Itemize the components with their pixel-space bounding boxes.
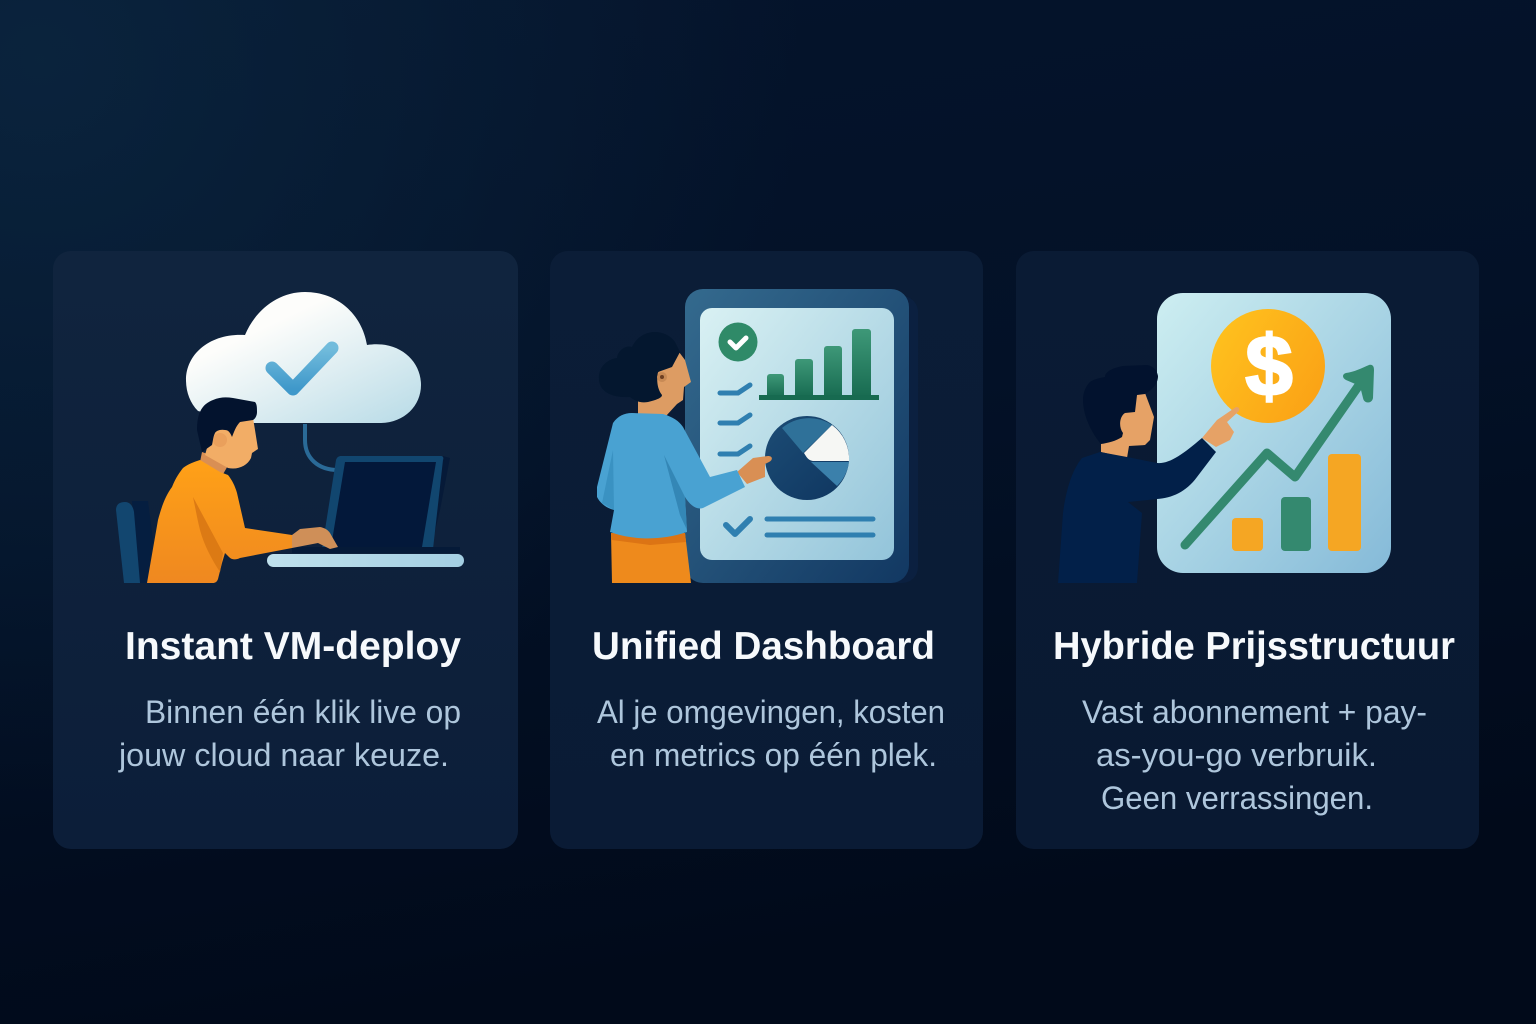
illustration: person deploying to cloud: [116, 292, 464, 583]
growth arrow: [1185, 365, 1374, 545]
body text: [1082, 694, 1427, 816]
pricing board: [1157, 293, 1391, 573]
person pointing: [1058, 365, 1239, 583]
body text: Vast abonnement + pay-: [1082, 694, 1427, 730]
body text: jouw cloud naar keuze.: [118, 737, 449, 773]
body text: [118, 694, 461, 773]
body text: [597, 694, 945, 773]
person pointing: [597, 332, 772, 583]
pie chart: [765, 416, 849, 500]
chair: [116, 501, 153, 583]
heading: Instant VM-deploy: [125, 625, 461, 668]
bar chart: [759, 329, 879, 400]
icon: dollar coin: $: [1245, 319, 1293, 414]
dashboard screen: [700, 308, 894, 560]
body text: Geen verrassingen.: [1101, 780, 1373, 816]
panel: Unified Dashboard: [550, 251, 983, 849]
tablet frame: [685, 289, 918, 583]
heading: Hybride Prijsstructuur: [1053, 625, 1455, 668]
keyboard bar: [267, 554, 464, 567]
connector cable: [305, 424, 338, 470]
summary lines with check: [726, 519, 873, 535]
icon: green check: [718, 322, 758, 362]
body text: Al je omgevingen, kosten: [597, 694, 945, 730]
body text: en metrics op één plek.: [610, 737, 937, 773]
bar chart: [1232, 454, 1361, 551]
heading: Unified Dashboard: [592, 625, 935, 668]
person typing: [147, 397, 338, 583]
illustration: person at dashboard: [597, 289, 918, 583]
icon: laptop: [267, 456, 464, 567]
illustration: person pointing at pricing: [1058, 293, 1391, 583]
icon: cloud with check: [186, 292, 421, 423]
panel: Instant VM-deploy: [53, 251, 518, 849]
body text: Binnen één klik live op: [145, 694, 461, 730]
body text: as-you-go verbruik.: [1096, 737, 1377, 773]
panel: Hybride Prijsstructuur: [1016, 251, 1479, 849]
icon: dollar coin: [1211, 309, 1325, 423]
checklist: [720, 385, 750, 454]
